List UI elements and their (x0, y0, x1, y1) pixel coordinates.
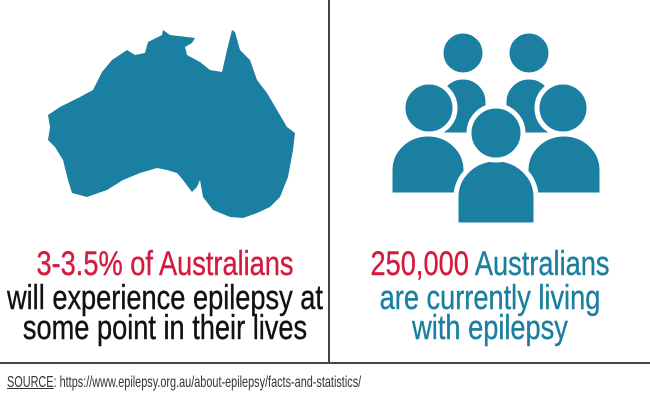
text: right statistic (371, 245, 609, 347)
text: left statistic: will experience epilepsy at (7, 279, 323, 317)
vertical divider (328, 0, 330, 363)
icon: group of people (392, 34, 600, 222)
text: left statistic: 3-3.5% of Australians (36, 245, 294, 283)
text: right statistic: with epilepsy (412, 309, 568, 347)
icon: australia map (48, 30, 295, 218)
horizontal divider (0, 362, 650, 364)
text: left statistic (6, 245, 323, 347)
text: right statistic: are currently living (380, 279, 600, 317)
text: left statistic: some point in their lives (23, 309, 307, 347)
source: SOURCE: https://www.epilepsy.org.au/about-epilepsy/facts-and-statistics/ (7, 374, 361, 391)
text: right statistic: 250,000 Australians (371, 245, 609, 283)
